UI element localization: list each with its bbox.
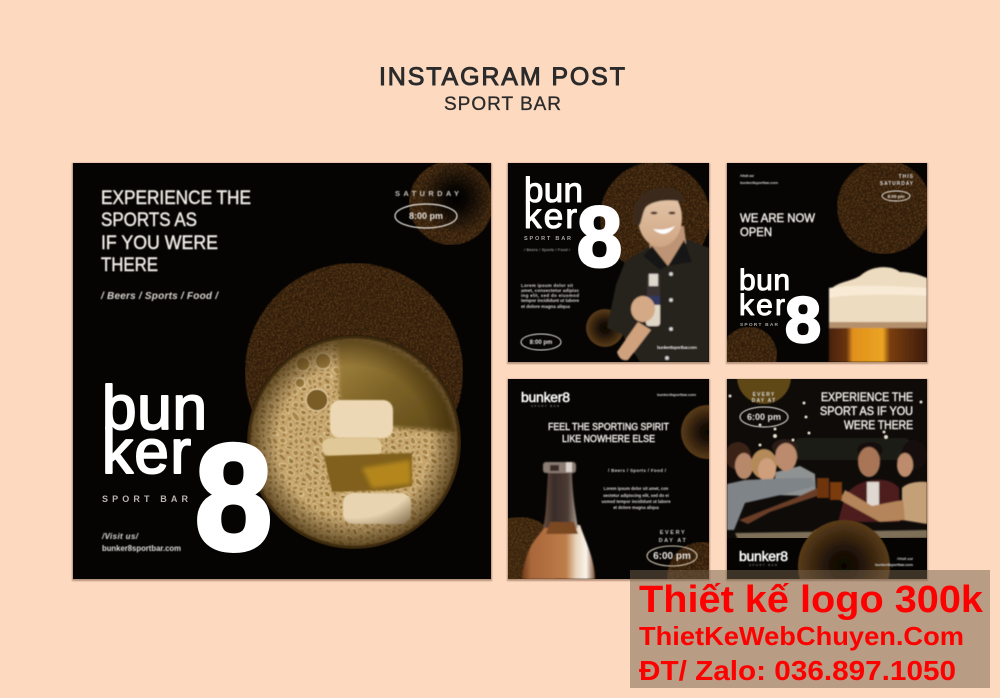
- small address: bunker8sportbar.com: [740, 180, 778, 185]
- logo: SPORT BAR: [749, 563, 778, 567]
- logo: bunker 8: ker: [524, 197, 577, 236]
- panel: man with bottle post: [508, 162, 710, 362]
- headline: [740, 211, 816, 239]
- headline: WE ARE NOW: [740, 211, 816, 225]
- time badge: 8:00 pm: [530, 340, 552, 346]
- headline: SPORTS AS: [101, 210, 197, 231]
- time badge: 8:00 pm: [409, 211, 443, 221]
- headline: LIKE NOWHERE ELSE: [562, 434, 655, 445]
- banner background: [630, 570, 990, 688]
- logo: bunker 8: bun: [739, 264, 790, 297]
- logo: bunker 8: [740, 268, 820, 344]
- headline: OPEN: [740, 225, 772, 239]
- website: bunker8sportbar.com: [657, 392, 696, 397]
- logo: bunker8: [521, 389, 570, 405]
- body copy: [601, 486, 671, 510]
- dotted circle bottom right: [667, 542, 709, 579]
- logo: bunker 8: ker: [102, 418, 191, 487]
- headline: [820, 392, 913, 432]
- logo: SPORT BAR: [531, 404, 560, 408]
- tagline: / Beers / Sports / Food /: [608, 468, 667, 473]
- title: INSTAGRAM POST: [379, 63, 625, 91]
- time badge: 8:00 pm: [887, 194, 905, 199]
- headline: IF YOU WERE: [101, 233, 218, 254]
- logo: bunker 8: [524, 176, 621, 268]
- banner website: ThietKeWebChuyen.Com: [639, 621, 964, 651]
- logo: bunker 8: [102, 383, 270, 553]
- photo: friends toasting at a table: [725, 438, 927, 540]
- photo: smiling man holding bottle: [607, 188, 709, 362]
- panel: we are now open post: [727, 163, 927, 362]
- beer glass from above: [245, 335, 465, 550]
- time badge: SATURDAY: [880, 181, 914, 187]
- website: bunker8sportbar.com: [657, 345, 697, 350]
- photo: beer bottle: [522, 462, 595, 579]
- headline: [548, 422, 669, 445]
- dotted circle bottom: [798, 520, 890, 612]
- dotted circle behind glass: [245, 263, 463, 410]
- time badge: EVERY: [660, 530, 686, 536]
- dotted circle small: [586, 309, 624, 347]
- time badge: [647, 530, 697, 566]
- time badge: [880, 174, 914, 201]
- time badge: THIS: [899, 174, 914, 180]
- time badge: 6:00 pm: [653, 551, 691, 562]
- logo: bunker 8: 8: [785, 284, 821, 356]
- dotted circle top right: [409, 161, 493, 245]
- headline: EXPERIENCE THE: [101, 188, 251, 209]
- logo: bunker 8: ker: [739, 289, 785, 322]
- logo: bunker 8: 8: [577, 190, 622, 285]
- promo banner: [630, 570, 990, 688]
- headline: [101, 188, 251, 276]
- dotted circle top right: [837, 160, 931, 254]
- visit link: /Visit us/: [101, 532, 139, 541]
- panel: main beer glass post: [73, 161, 493, 581]
- headline: EXPERIENCE THE: [821, 392, 913, 404]
- body copy: tempor incididunt ut labore: [521, 298, 579, 303]
- headline: FEEL THE SPORTING SPIRIT: [548, 422, 669, 433]
- photo: beer mug with foam: [829, 267, 927, 362]
- logo: bunker 8: SPORT BAR: [740, 322, 779, 328]
- bottom bar: [727, 538, 927, 579]
- small address: [740, 173, 778, 185]
- banner headline: Thiết kế logo 300k: [639, 579, 984, 621]
- dotted circle top: [600, 162, 710, 272]
- visit link: [101, 532, 181, 553]
- time badge: [740, 392, 788, 427]
- headline: SPORT AS IF YOU: [820, 406, 913, 418]
- body copy: Lorem ipsum dolor sit amet, con: [604, 486, 669, 491]
- body copy: et dolore magna aliqua: [521, 304, 570, 309]
- dotted circle bottom left: [508, 517, 555, 579]
- string lights: [728, 394, 922, 446]
- logo: bunker 8: SPORT BAR: [102, 494, 188, 504]
- website: /Visit us/: [897, 556, 914, 561]
- time badge: 6:00 pm: [747, 412, 781, 422]
- body copy: Lorem ipsum dolor sit: [521, 283, 573, 288]
- dotted circle bottom left: [727, 327, 777, 362]
- logo: bunker 8: 8: [195, 413, 272, 581]
- time badge: EVERY: [753, 392, 775, 398]
- banner phone: ĐT/ Zalo: 036.897.1050: [639, 655, 956, 686]
- tagline: / Beers / Sports / Food /: [100, 291, 219, 302]
- body copy: et dolore magna aliqua: [613, 505, 659, 510]
- headline: WERE THERE: [844, 420, 913, 432]
- body copy: amet, consectetur adipisc: [521, 288, 579, 293]
- body copy: usmod tempor incididunt ut labore: [601, 499, 671, 504]
- website: bunker8sportbar.com: [875, 562, 913, 567]
- time badge: [521, 334, 561, 350]
- body copy: ing elit, sed do eiusmod: [521, 293, 579, 298]
- visit link: bunker8sportbar.com: [102, 544, 181, 553]
- time badge: DAY AT: [659, 538, 687, 544]
- tagline: / Beers / Sports / Food /: [524, 247, 571, 252]
- dotted circle top: [737, 350, 791, 404]
- panel: bottle post: [508, 379, 709, 579]
- time badge: DAY AT: [752, 398, 776, 404]
- panel: friends toasting post: [727, 379, 927, 579]
- logo: bunker 8: SPORT BAR: [524, 236, 571, 242]
- logo: bunker 8: bun: [524, 171, 583, 210]
- body copy: sectetur adipiscing elit, sed do ei: [603, 493, 669, 498]
- small address: /Visit us/: [740, 173, 755, 178]
- headline: THERE: [101, 255, 158, 276]
- logo: bunker8: [739, 548, 788, 564]
- logo: bunker 8: bun: [102, 374, 207, 443]
- body copy: [521, 283, 579, 309]
- time badge: SATURDAY: [395, 189, 459, 198]
- subtitle: SPORT BAR: [444, 94, 561, 115]
- time badge: [395, 189, 459, 228]
- website: [875, 556, 914, 567]
- dotted circle right: [680, 404, 709, 460]
